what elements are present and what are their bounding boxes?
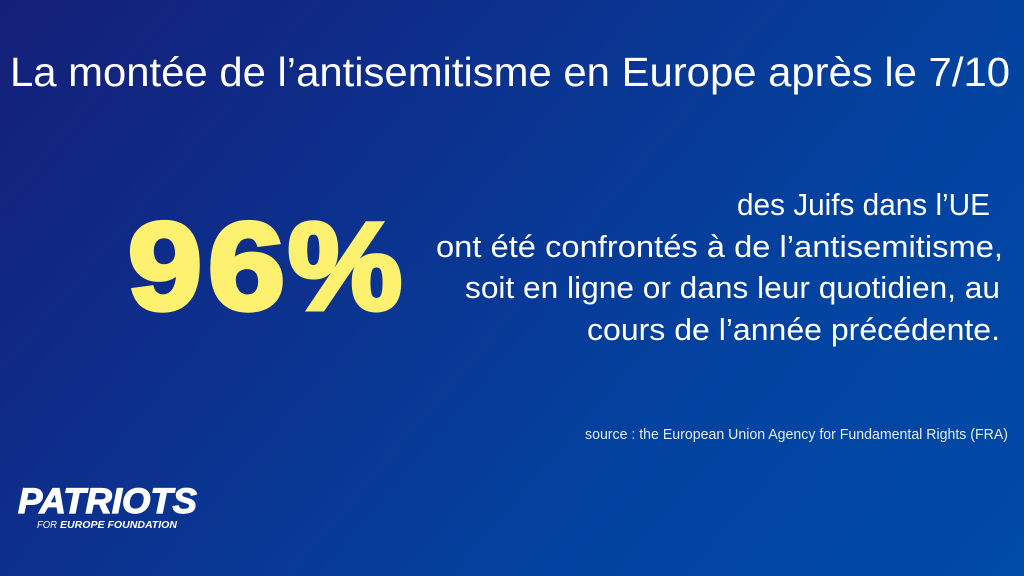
logo: Patriots for Europe Foundation: PATRIOTS: [18, 482, 197, 521]
description text block: soit en ligne or dans leur quotidien, au: [465, 270, 1000, 305]
big statistic: 96%: %: [288, 198, 402, 336]
big statistic: 96%: [128, 198, 402, 336]
description text block: cours de l’année précédente.: [587, 312, 1000, 347]
description text block: des Juifs dans l’UE: [737, 187, 990, 222]
big statistic: 96%: 9: [128, 198, 202, 336]
big statistic: 96%: 6: [208, 198, 285, 336]
description text block: ont été confrontés à de l’antisemitisme,: [436, 229, 1003, 264]
logo: Patriots for Europe Foundation: FOR: [37, 520, 57, 531]
source note: source : the European Union Agency for Fundamental Rights (FRA): [585, 426, 1008, 443]
title: La montée de l’antisemitisme en Europe après le 7/10: [10, 49, 1010, 95]
description text block: [436, 187, 1003, 347]
logo: Patriots for Europe Foundation: EUROPE FOUNDATION: [60, 520, 178, 531]
